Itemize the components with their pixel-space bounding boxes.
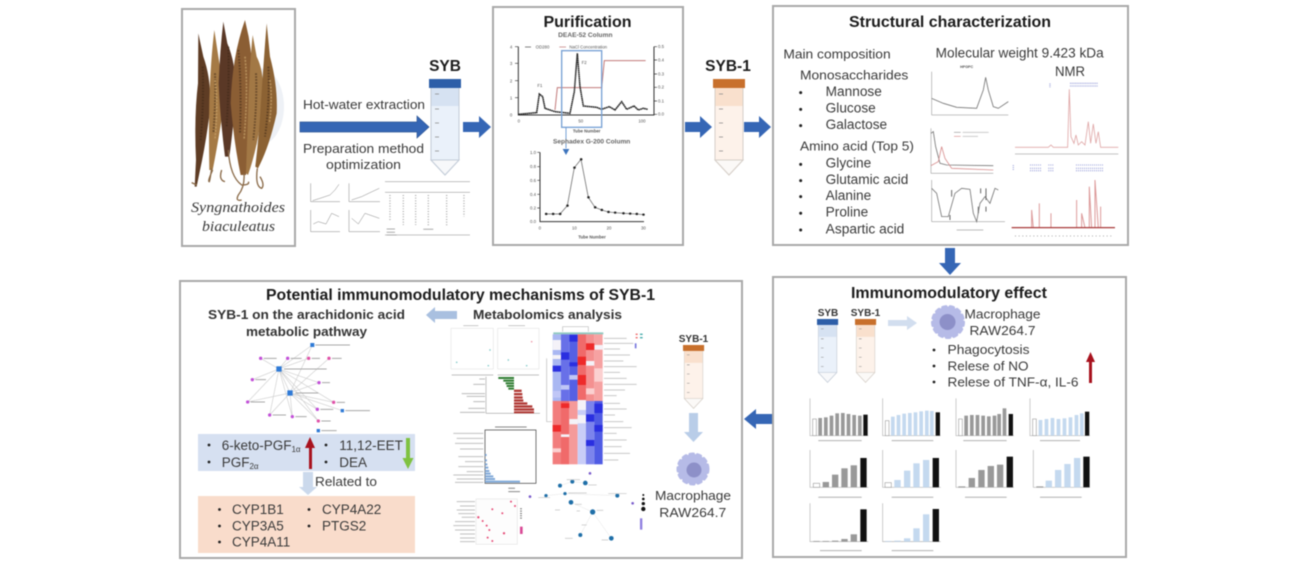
chart: DEAE-52 and Sephadex elution: 0.4 (530, 192, 537, 197)
arrow: SYB-1 to macrophage (684, 413, 703, 442)
text: main composition list: Alanine (826, 188, 871, 203)
box: related genes: CYP4A22 (322, 502, 381, 517)
text: main composition list: Aspartic acid (826, 221, 904, 236)
panel: Structural characterization (773, 6, 1128, 245)
panel: Syngnathoides biaculeatus specimen (182, 9, 295, 246)
text: immune responses (933, 343, 1079, 390)
species name (191, 200, 285, 235)
chart C (959, 408, 1013, 436)
box: metabolite changes: DEA (339, 455, 367, 470)
chart: DEAE-52 and Sephadex elution: 10 (572, 226, 577, 231)
chart: DEAE-52 and Sephadex elution: 30 (641, 226, 646, 231)
text: Macrophage RAW264.7 (964, 308, 1041, 338)
box: metabolite changes (198, 434, 415, 471)
text: Related to: Related to (315, 474, 377, 489)
icon: macrophage (932, 306, 964, 338)
icon: macrophage (678, 454, 708, 484)
arrow: increase (1086, 352, 1095, 383)
chart D (1033, 412, 1089, 436)
box: metabolite changes: PGF (222, 455, 249, 470)
chart: metabolite-gene network (246, 343, 370, 432)
chart: DEAE-52 and Sephadex elution: 0.2 (658, 85, 665, 90)
text: main composition list: Galactose (826, 117, 887, 132)
subheading: arachidonic acid pathway (208, 307, 405, 339)
chart: DEAE-52 and Sephadex elution: OD280 (536, 45, 550, 50)
chart: DEAE-52 and Sephadex elution: 0.5 (658, 44, 665, 49)
icon: SYB tube (817, 319, 838, 382)
label: SYB-1: SYB-1 (851, 308, 881, 319)
species name: biaculeatus (202, 219, 275, 235)
text: Preparation method optimization (303, 141, 424, 172)
chart: DEAE-52 and Sephadex elution: 0.1 (658, 98, 665, 103)
text: Macrophage RAW264.7: RAW264.7 (970, 324, 1036, 338)
arrow: immunomodulatory effect to mechanisms (744, 409, 772, 429)
chart: DEAE-52 and Sephadex elution: F2 (582, 60, 587, 65)
chart: DEAE-52 and Sephadex elution: 0 (510, 112, 513, 117)
text: immune responses: Relese of TNF-α, IL-6 (948, 376, 1079, 390)
text: main composition list: Mannose (826, 84, 882, 99)
box: related genes: CYP1B1 (232, 502, 284, 517)
arrow: tubes to macrophage (888, 316, 917, 330)
text: Hot-water extraction: Hot-water extraction (303, 97, 425, 112)
arrow: purification to SYB-1 (685, 116, 712, 138)
chart E (813, 458, 867, 487)
text: main composition list: Glutamic acid (826, 172, 908, 187)
text: Preparation method optimization: Preparation method (303, 141, 424, 156)
chart: DEAE-52 and Sephadex elution: 0.6 (530, 178, 537, 183)
text: main composition list: Main composition (783, 46, 891, 61)
arrow: structural characterization to immunomodulatory effect (939, 248, 961, 275)
icon: SYB tube (429, 79, 461, 175)
chart: DEAE-52 and Sephadex elution: Sephadex G-200 Column (553, 139, 631, 145)
chart: DEAE-52 and Sephadex elution: 1 (510, 95, 513, 100)
arrow: metabolites down (402, 438, 414, 469)
chart: DEAE-52 and Sephadex elution: 0.4 (658, 57, 665, 62)
chart: DEAE-52 and Sephadex elution (510, 33, 665, 240)
chart B (885, 411, 940, 436)
charts: bar charts A to J (810, 398, 1090, 551)
heading: Purification: Purification (543, 14, 632, 31)
box: related genes: PTGS2 (322, 518, 366, 534)
chart: DEAE-52 and Sephadex elution: 4 (510, 44, 513, 49)
chart J (885, 509, 939, 542)
text: main composition list: Glucose (826, 101, 876, 116)
charts: metabolomics PCA and bar plots (451, 326, 540, 544)
text: NMR: NMR (1055, 64, 1085, 79)
text: Macrophage RAW264.7: Macrophage (655, 489, 731, 503)
chart: DEAE-52 and Sephadex elution: Tube Number (573, 128, 601, 133)
label: SYB: SYB (818, 308, 838, 319)
box: metabolite changes: 11,12-EET (339, 438, 403, 453)
chart: pathway enrichment network (529, 472, 645, 541)
chart: DEAE-52 and Sephadex elution: 100 (638, 119, 646, 124)
arrow: metabolomics to pathway (426, 307, 457, 323)
panel: Purification (493, 7, 683, 245)
text: main composition list: Amino acid (Top 5) (800, 139, 914, 154)
text: immune responses: Relese of NO (948, 360, 1029, 374)
chart: DEAE-52 and Sephadex elution: 0.0 (530, 219, 537, 224)
arrow: related to (299, 472, 317, 495)
arrow: SYB-1 to structural characterization (744, 116, 771, 138)
icon: dried pipefish specimens (192, 20, 284, 200)
text: Macrophage RAW264.7: Macrophage (964, 308, 1041, 322)
charts: HPGPC, UV and IR spectra (931, 65, 1008, 230)
icon: SYB-1 tube (683, 345, 704, 408)
chart: DEAE-52 and Sephadex elution: 2 (510, 78, 513, 83)
chart: DEAE-52 and Sephadex elution: Tube Number (578, 235, 606, 240)
heading: Immunomodulatory effect: Immunomodulatory effect (851, 285, 1047, 302)
chart: DEAE-52 and Sephadex elution: NaCl Concentration (569, 45, 608, 50)
chart: DEAE-52 and Sephadex elution: 0.8 (530, 164, 537, 169)
heading: Potential immunomodulatory mechanisms of SYB-1: Potential immunomodulatory mechanisms of SYB-1 (266, 287, 655, 304)
species name: Syngnathoides (191, 200, 285, 216)
chart: heatmap (547, 327, 643, 464)
chart H (1037, 457, 1090, 487)
text: main composition list: Proline (826, 205, 868, 220)
box: metabolite changes: 2α (249, 462, 259, 471)
box: related genes: CYP4A11 (232, 534, 290, 550)
chart A (813, 413, 868, 436)
charts: preparation optimization (311, 182, 470, 235)
chart G (959, 457, 1013, 487)
chart: DEAE-52 and Sephadex elution: 3 (510, 61, 513, 66)
icon: SYB-1 tube (713, 79, 745, 175)
label: SYB: SYB (429, 58, 461, 75)
text: main composition list: Glycine (826, 156, 871, 171)
charts: HPGPC, UV and IR spectra: HPGPC (960, 65, 974, 69)
chart: DEAE-52 and Sephadex elution: 0.0 (658, 112, 665, 117)
heading: Structural characterization: Structural characterization (849, 14, 1051, 31)
label: SYB-1: SYB-1 (705, 58, 751, 75)
chart: DEAE-52 and Sephadex elution: 1.0 (530, 150, 537, 155)
chart: DEAE-52 and Sephadex elution: 0 (518, 119, 521, 124)
panel: Immunomodulatory effect (773, 277, 1126, 557)
box: metabolite changes: 1α (291, 445, 301, 454)
text: immune responses: Phagocytosis (948, 343, 1030, 357)
subheading: arachidonic acid pathway: metabolic pathway (246, 324, 368, 339)
arrow: hot-water extraction to SYB (300, 116, 429, 138)
chart: DEAE-52 and Sephadex elution: DEAE-52 Column (558, 33, 613, 39)
text: Macrophage RAW264.7: RAW264.7 (659, 506, 726, 520)
panel: Potential immunomodulatory mechanisms (180, 281, 742, 558)
chart: DEAE-52 and Sephadex elution: 0.2 (530, 206, 537, 211)
box: metabolite changes: 6-keto-PGF (222, 438, 291, 453)
text: main composition list: Monosaccharides (800, 67, 909, 82)
text: molecular weight: Molecular weight 9.423 kDa (936, 46, 1104, 60)
chart: DEAE-52 and Sephadex elution: 0 (539, 226, 542, 231)
box: related genes (198, 496, 415, 553)
chart: DEAE-52 and Sephadex elution: 50 (578, 119, 584, 124)
chart: DEAE-52 and Sephadex elution: 0.3 (658, 71, 665, 76)
subheading: Metabolomics analysis: Metabolomics analysis (473, 307, 622, 322)
box: related genes: CYP3A5 (232, 518, 284, 534)
arrow: metabolites up (305, 437, 315, 469)
chart: DEAE-52 and Sephadex elution: F1 (537, 83, 543, 88)
subheading: arachidonic acid pathway: SYB-1 on the arachidonic acid (208, 307, 405, 322)
charts: NMR spectra (1012, 83, 1118, 236)
chart F (885, 458, 939, 487)
chart I (813, 509, 867, 542)
icon: SYB-1 tube (855, 319, 876, 382)
chart: DEAE-52 and Sephadex elution: 20 (607, 226, 612, 231)
text: Macrophage RAW264.7 (655, 489, 731, 520)
text: Preparation method optimization: optimization (326, 157, 401, 172)
arrow: SYB to purification (463, 116, 491, 138)
text: main composition list (783, 46, 914, 236)
label: SYB-1: SYB-1 (679, 334, 709, 345)
